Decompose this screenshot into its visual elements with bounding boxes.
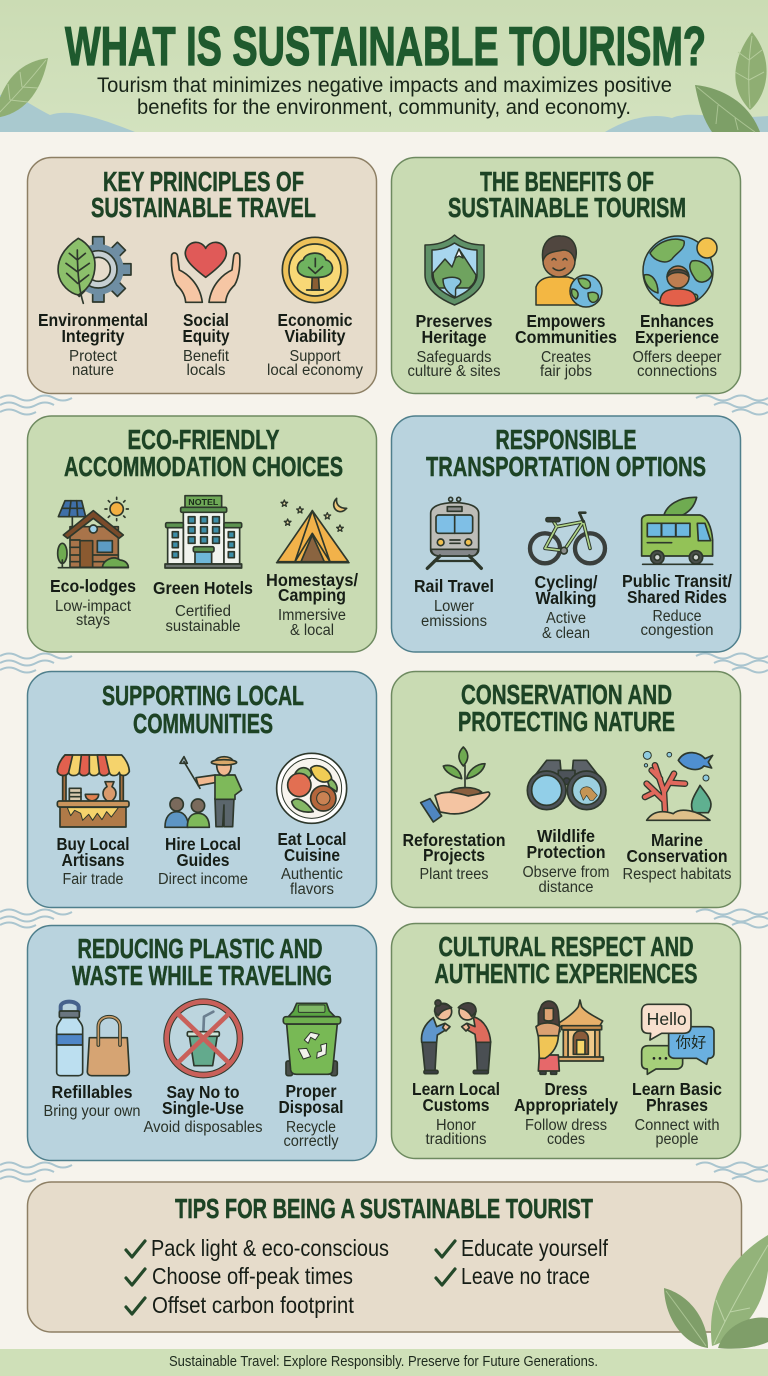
icon: electric bus (642, 497, 713, 564)
heading: accommodation: ACCOMMODATION CHOICES (64, 451, 343, 482)
item: buy local artisans (56, 834, 130, 888)
item: empowers communities: Creates (541, 349, 591, 366)
item: learn basic phrases: people (656, 1131, 698, 1148)
footer band (0, 1349, 768, 1376)
item: proper disposal: correctly (284, 1133, 339, 1150)
item: learn basic phrases (632, 1079, 722, 1148)
panel: benefits (392, 158, 740, 394)
item: eco-lodges (50, 576, 136, 629)
item: economic viability: local economy (267, 362, 363, 379)
heading: reducing plastic: WASTE WHILE TRAVELING (72, 960, 332, 991)
item: refillables: Bring your own (44, 1103, 140, 1120)
item: social equity: Social (183, 310, 229, 330)
item: learn local customs: Customs (422, 1095, 490, 1115)
icon: coin with tree (282, 237, 348, 303)
item: wildlife protection: Wildlife (537, 826, 595, 846)
item: wildlife protection: Protection (526, 842, 606, 862)
item: rail travel (414, 576, 494, 630)
panel: key principles (28, 158, 376, 394)
item: enhances experience: Experience (635, 327, 719, 347)
item: dress appropriately: Appropriately (514, 1095, 618, 1115)
item: eat local cuisine: flavors (290, 881, 334, 898)
item: enhances experience: Offers deeper (632, 349, 722, 366)
item: environmental integrity (38, 310, 148, 379)
heading: benefits (448, 166, 686, 223)
icon: two people bowing (421, 1000, 491, 1074)
item: preserves heritage: Safeguards (416, 349, 492, 366)
item: refillables: Refillables (52, 1082, 133, 1102)
item: marine conservation: Respect habitats (622, 866, 732, 883)
heading: benefits: THE BENEFITS OF (480, 166, 654, 197)
item: learn basic phrases: Connect with (634, 1117, 720, 1134)
checklist: left column (126, 1235, 389, 1318)
heading: reducing plastic (72, 933, 332, 991)
item: cycling and walking (534, 572, 598, 642)
item: cycling and walking: Walking (536, 588, 596, 608)
item: dress appropriately (514, 1079, 618, 1148)
item: eat local cuisine (278, 829, 346, 898)
item: marine conservation: Marine (651, 830, 703, 850)
panel: transportation (392, 416, 740, 652)
heading: tips: TIPS FOR BEING A SUSTAINABLE TOURIST (175, 1193, 593, 1224)
item: proper disposal: Proper (286, 1081, 337, 1101)
heading: local communities (102, 680, 304, 739)
item: say no to single-use: Avoid disposables (144, 1119, 263, 1136)
icon: hand holding sapling (421, 747, 490, 822)
item: proper disposal (278, 1081, 344, 1150)
heading: transportation: RESPONSIBLE (496, 424, 636, 455)
item: preserves heritage: Preserves (416, 311, 493, 331)
item: wildlife protection (522, 826, 610, 896)
item: hire local guides (158, 834, 248, 888)
item: eco-lodges: Eco-lodges (50, 576, 136, 596)
icon: hands and heart (171, 242, 240, 302)
item: environmental integrity: Protect (69, 348, 118, 365)
item: hire local guides: Direct income (158, 871, 248, 888)
checklist: left column: Pack light & eco-conscious (151, 1235, 389, 1261)
item: learn local customs: Learn Local (412, 1079, 500, 1099)
subtitle (97, 74, 672, 119)
item: rail travel: Lower (434, 598, 474, 615)
item: rail travel: emissions (421, 613, 487, 630)
checklist: right column: Leave no trace (461, 1263, 590, 1289)
item: public transit: Reduce (652, 608, 702, 625)
footer text: Sustainable Travel: Explore Responsibly. Preserve for Future Generations. (169, 1354, 598, 1370)
heading: cultural respect (434, 931, 698, 989)
item: preserves heritage (408, 311, 501, 380)
subtitle: benefits for the environment, community, and economy. (137, 96, 631, 119)
item: environmental integrity: Environmental (38, 310, 148, 330)
checklist: right column (436, 1235, 609, 1289)
item: eat local cuisine: Authentic (281, 866, 343, 883)
item: learn basic phrases: Learn Basic (632, 1079, 722, 1099)
item: learn local customs: Honor (436, 1117, 476, 1134)
item: economic viability (267, 310, 363, 379)
panel: accommodation (28, 416, 376, 652)
icon: greetings in speech bubbles: Hello (647, 1009, 687, 1029)
icon: globe with traveller (643, 236, 717, 306)
item: buy local artisans: Fair trade (62, 871, 124, 888)
icon: green hotel (165, 496, 242, 568)
item: green hotels: sustainable (166, 618, 240, 635)
item: enhances experience (632, 311, 722, 380)
item: environmental integrity: Integrity (62, 326, 125, 346)
item: dress appropriately: codes (547, 1131, 585, 1148)
panel: local communities (28, 672, 376, 908)
item: preserves heritage: Heritage (422, 327, 487, 347)
icon: recycling bin (283, 1003, 341, 1076)
icon: heritage shield (425, 235, 484, 305)
item: cycling and walking: Cycling/ (534, 572, 598, 592)
item: public transit: congestion (640, 622, 714, 639)
panel: reducing plastic (28, 926, 376, 1160)
heading: reducing plastic: REDUCING PLASTIC AND (78, 933, 322, 964)
item: hire local guides: Hire Local (165, 834, 241, 854)
item: homestays and camping: & local (290, 622, 334, 639)
item: marine conservation (622, 830, 732, 883)
header banner (0, 0, 768, 132)
item: eco-lodges: Low-impact (55, 598, 132, 615)
item: green hotels (153, 578, 253, 635)
icon: green hotel: NOTEL (188, 497, 219, 507)
item: homestays and camping: Immersive (278, 607, 346, 624)
icon: train (427, 497, 481, 568)
heading: accommodation: ECO-FRIENDLY (128, 424, 280, 455)
item: green hotels: Green Hotels (153, 578, 253, 598)
checklist: left column: Choose off-peak times (152, 1263, 353, 1289)
leaves: bottom right (664, 1235, 768, 1349)
icon: eco-lodge (58, 497, 128, 568)
icon: greetings in speech bubbles: 你好 (676, 1035, 707, 1052)
item: green hotels: Certified (175, 603, 231, 620)
item: enhances experience: connections (637, 363, 717, 380)
item: homestays and camping: Homestays/ (266, 570, 358, 590)
item: learn local customs (412, 1079, 500, 1148)
heading: local communities: SUPPORTING LOCAL (102, 680, 304, 711)
icon: no single-use plastic (167, 1002, 240, 1075)
icon: tent under stars (277, 498, 349, 563)
item: say no to single-use: Say No to (166, 1082, 240, 1102)
item: buy local artisans: Buy Local (56, 834, 130, 854)
heading: conservation (458, 679, 675, 737)
subtitle: Tourism that minimizes negative impacts and maximizes positive (97, 74, 672, 97)
item: buy local artisans: Artisans (62, 850, 125, 870)
item: empowers communities: Communities (515, 327, 617, 347)
item: dress appropriately: Follow dress (525, 1117, 607, 1134)
icon: coral and fish (643, 751, 713, 820)
item: homestays and camping (266, 570, 358, 639)
icon: bicycle (530, 513, 605, 563)
item: learn local customs: traditions (426, 1131, 487, 1148)
item: marine conservation: Conservation (626, 846, 728, 866)
item: say no to single-use (144, 1082, 263, 1136)
checklist: left column: Offset carbon footprint (152, 1292, 355, 1318)
panel: cultural respect (392, 924, 740, 1158)
icon: market stall (57, 755, 129, 827)
icon: local guide (165, 757, 242, 827)
panel: tips (28, 1182, 742, 1332)
item: proper disposal: Recycle (286, 1119, 336, 1136)
item: social equity: Equity (182, 326, 230, 346)
icon: traditional dress and temple (536, 1000, 603, 1074)
panel: conservation (392, 672, 740, 908)
item: economic viability: Economic (278, 310, 353, 330)
item: hire local guides: Guides (176, 850, 230, 870)
icon: binoculars (527, 760, 606, 810)
item: say no to single-use: Single-Use (162, 1098, 244, 1118)
item: public transit: Public Transit/ (622, 571, 732, 591)
item: social equity: Benefit (183, 348, 230, 365)
item: eco-lodges: stays (76, 612, 110, 629)
item: reforestation: Reforestation (402, 830, 506, 850)
item: environmental integrity: nature (72, 362, 114, 379)
heading: accommodation (64, 424, 343, 482)
item: social equity: locals (186, 362, 226, 379)
item: eat local cuisine: Eat Local (278, 829, 346, 849)
item: wildlife protection: distance (538, 879, 594, 896)
icon: plate of local food (277, 753, 347, 823)
item: wildlife protection: Observe from (522, 864, 610, 881)
heading: transportation (426, 424, 706, 482)
checklist: right column: Educate yourself (461, 1235, 609, 1261)
item: cycling and walking: Active (546, 610, 586, 627)
item: homestays and camping: Camping (278, 585, 346, 605)
heading: key principles: KEY PRINCIPLES OF (103, 166, 304, 197)
item: dress appropriately: Dress (544, 1079, 588, 1099)
item: learn basic phrases: Phrases (646, 1095, 708, 1115)
item: public transit: Shared Rides (627, 587, 727, 607)
heading: key principles (91, 166, 316, 223)
item: enhances experience: Enhances (640, 311, 714, 331)
item: eat local cuisine: Cuisine (284, 845, 340, 865)
item: proper disposal: Disposal (278, 1097, 344, 1117)
icon: refillable bottle and tote bag (57, 1002, 129, 1076)
icon: leaf and gear (58, 237, 131, 303)
leaf: header top right (735, 32, 767, 110)
item: reforestation (402, 830, 506, 883)
item: rail travel: Rail Travel (414, 576, 494, 596)
item: empowers communities: Empowers (526, 311, 606, 331)
icon: greetings in speech bubbles (642, 1004, 714, 1074)
leaf: header bottom right (695, 85, 760, 132)
heading: conservation: PROTECTING NATURE (458, 706, 675, 737)
item: economic viability: Viability (284, 326, 346, 346)
item: reforestation: Plant trees (420, 866, 489, 883)
item: preserves heritage: culture & sites (408, 363, 501, 380)
item: cycling and walking: & clean (542, 625, 590, 642)
item: economic viability: Support (290, 348, 341, 365)
item: refillables (44, 1082, 140, 1120)
heading: local communities: COMMUNITIES (133, 708, 273, 739)
heading: conservation: CONSERVATION AND (461, 679, 672, 710)
item: public transit (622, 571, 732, 639)
item: reforestation: Projects (423, 845, 485, 865)
heading: key principles: SUSTAINABLE TRAVEL (91, 192, 316, 223)
item: social equity (182, 310, 230, 379)
leaf: header left (0, 58, 48, 118)
item: empowers communities (515, 311, 617, 380)
icon: person with globe (536, 236, 602, 307)
item: empowers communities: fair jobs (540, 363, 592, 380)
